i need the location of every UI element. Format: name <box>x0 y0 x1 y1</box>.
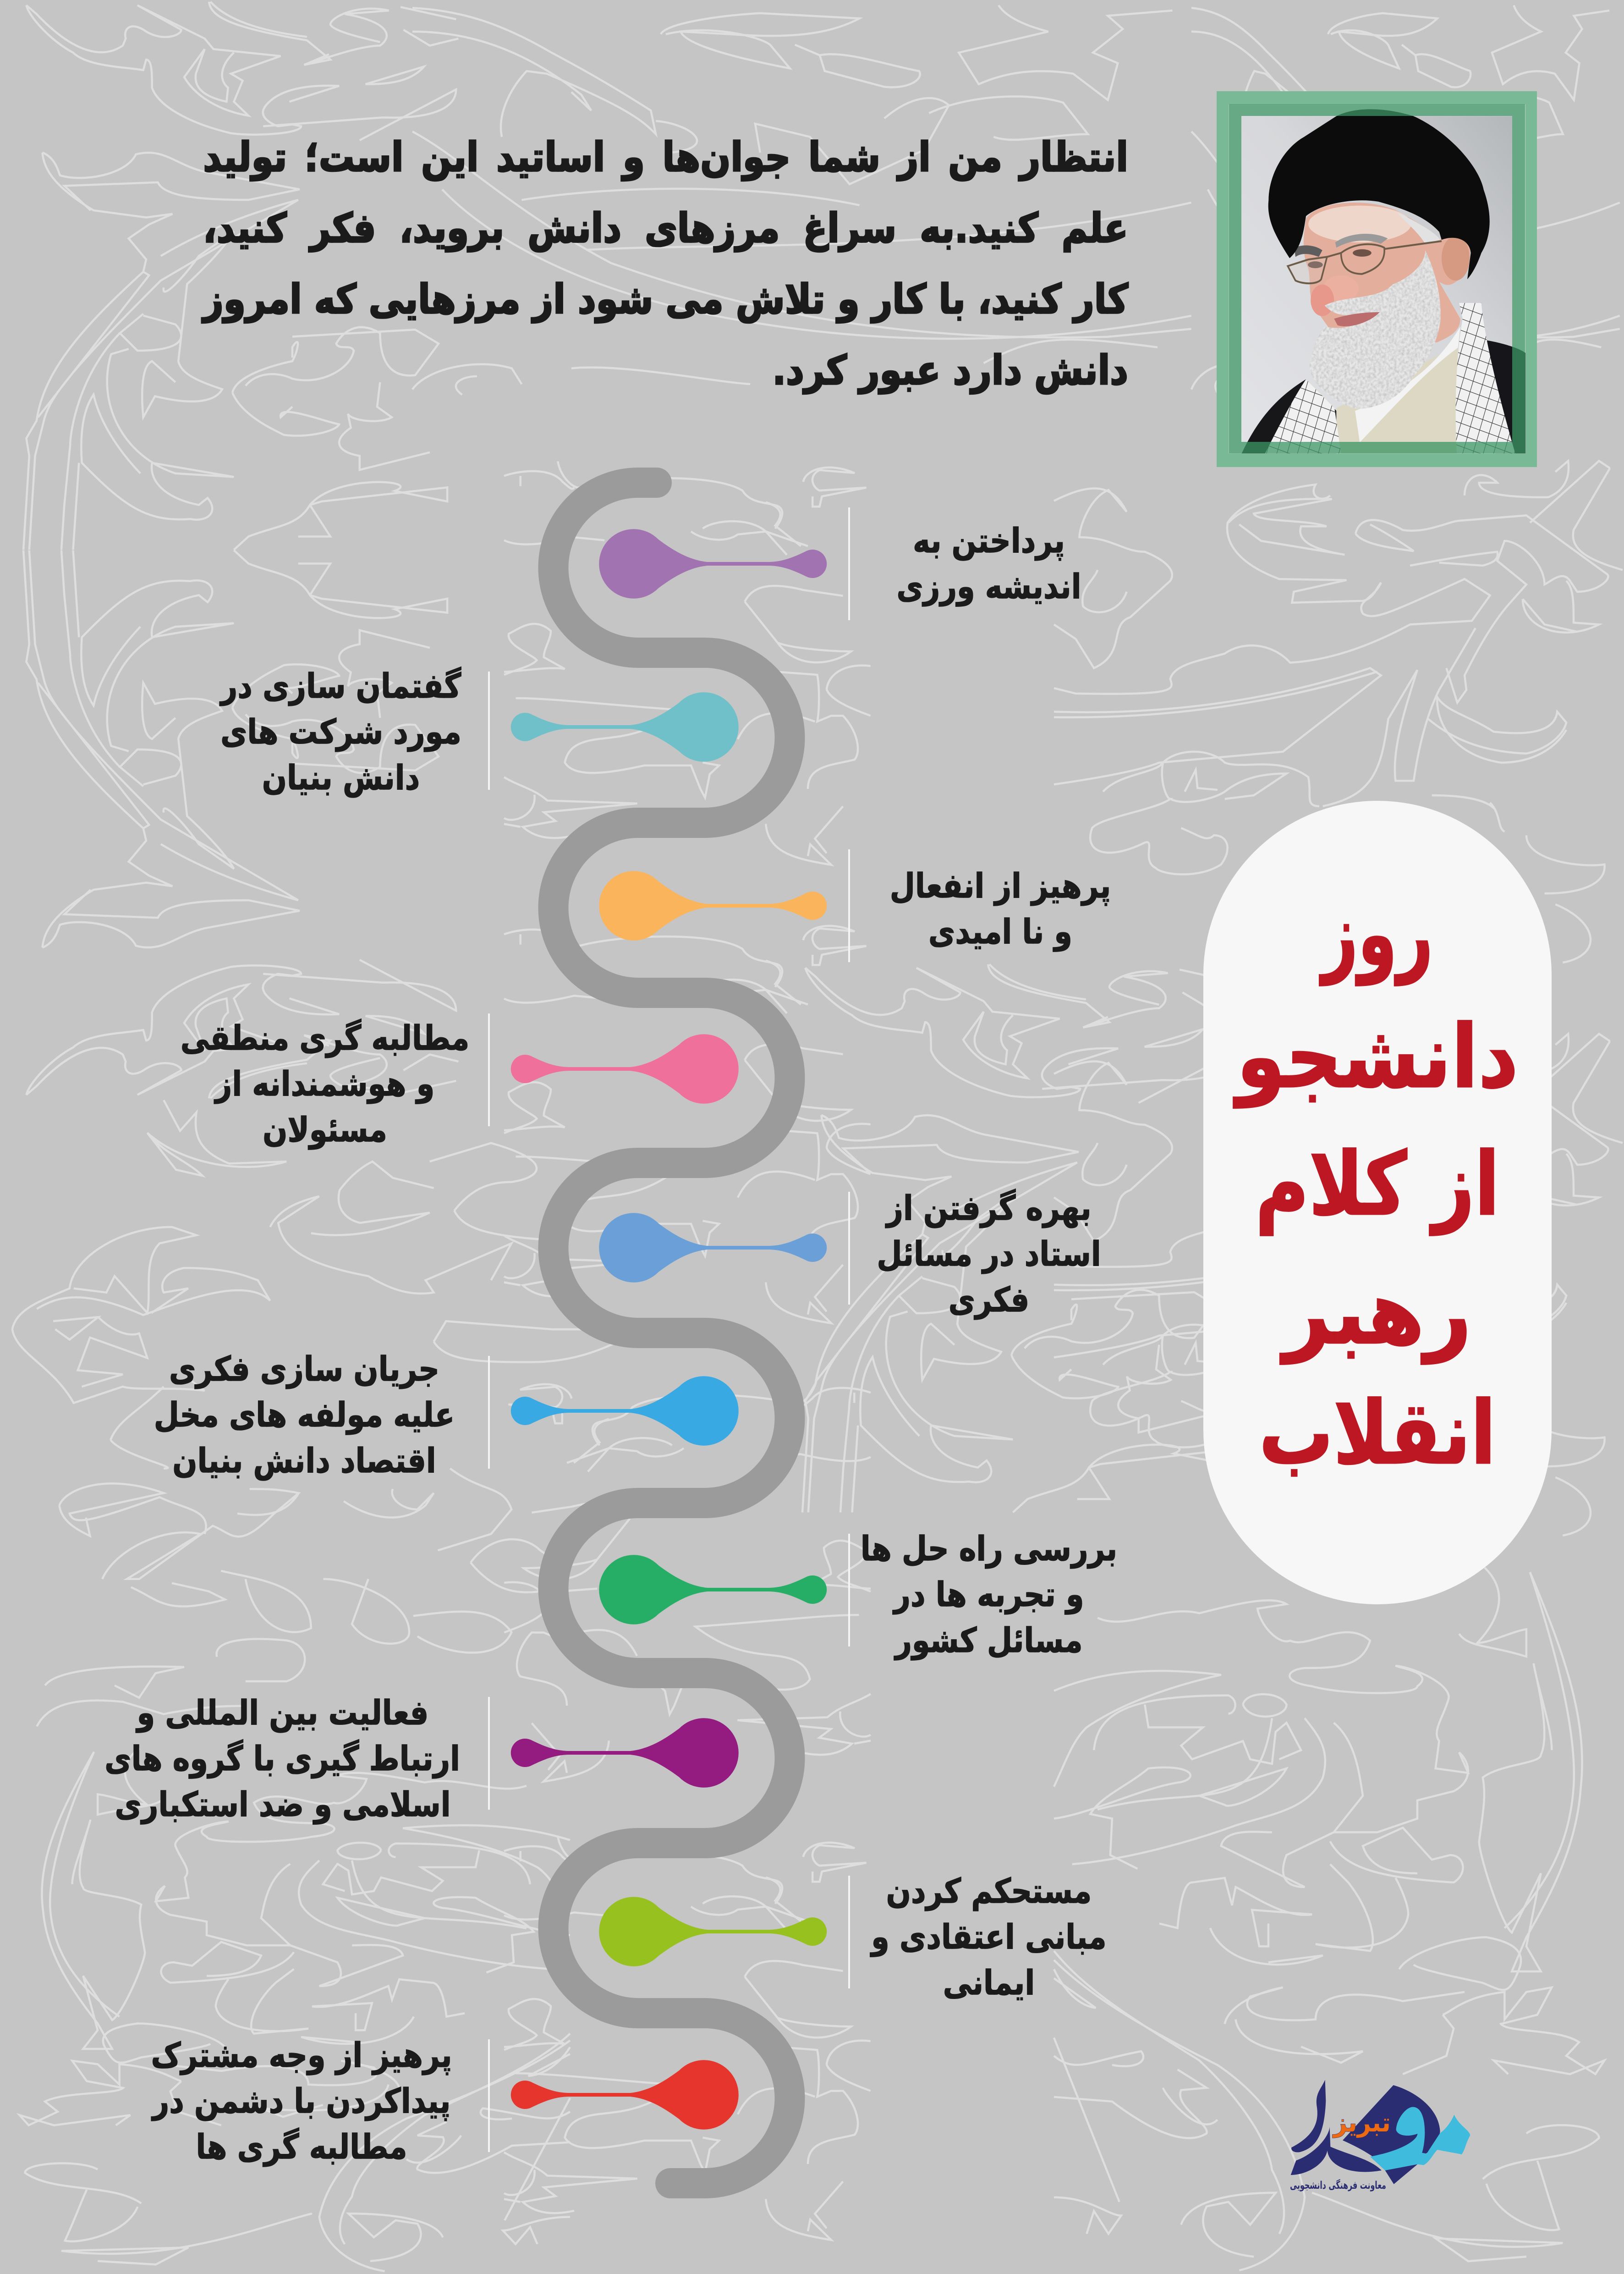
title pill: انقلاب <box>1259 1382 1496 1484</box>
label 4 <box>148 1015 502 1153</box>
beard <box>1310 250 1441 409</box>
title pill: روز <box>1322 884 1433 985</box>
label 3: و نا امیدی <box>928 912 1072 952</box>
drop marker 1 <box>599 529 827 599</box>
drop marker 10 <box>511 2060 739 2130</box>
label 2: مورد شرکت های <box>220 712 461 752</box>
label 8: ارتباط گیری با گروه های <box>104 1739 460 1778</box>
glasses <box>1288 241 1442 283</box>
logo: معاونت فرهنگی دانشجویی <box>1290 2179 1386 2191</box>
label 6: اقتصاد دانش بنیان <box>172 1441 436 1481</box>
label 6 <box>127 1346 482 1484</box>
quote text: کار کنید، با کار و تلاش می شود از مرزهایی که امروز <box>203 275 1128 323</box>
title pill: دانشجو <box>1236 1006 1519 1107</box>
label 3: پرهیز از انفعال <box>890 866 1111 906</box>
label 4: و هوشمندانه از <box>215 1064 434 1104</box>
white label separators <box>488 507 850 2152</box>
label 1 <box>812 518 1166 610</box>
portrait frame outer band <box>1217 91 1537 467</box>
label 1: اندیشه ورزی <box>896 567 1081 606</box>
label 4: مسئولان <box>263 1110 387 1150</box>
label 3 <box>823 863 1178 955</box>
label 5 <box>812 1185 1166 1323</box>
label 10 <box>124 2032 479 2170</box>
drop marker 3 <box>599 871 827 941</box>
title pill <box>1203 801 1552 1604</box>
label 6: جریان سازی فکری <box>169 1349 439 1389</box>
face <box>1294 203 1470 342</box>
label 5: فکری <box>949 1280 1029 1320</box>
label 10: پرهیز از وجه مشترک <box>151 2036 452 2075</box>
label 6: علیه مولفه های مخل <box>154 1395 455 1435</box>
label 9: ایمانی <box>943 1963 1035 2003</box>
quote text <box>203 121 1128 406</box>
label 9: مبانی اعتقادی و <box>871 1917 1107 1957</box>
title pill: رهبر <box>1284 1262 1471 1364</box>
label 10: مطالبه گری ها <box>196 2127 407 2167</box>
drop marker 8 <box>511 1718 739 1788</box>
label 8: اسلامی و ضد استکباری <box>115 1785 451 1824</box>
label 9: مستحکم کردن <box>886 1872 1092 1911</box>
logo: تبریز <box>1332 2108 1391 2138</box>
portrait <box>1229 104 1525 453</box>
label 7: بررسی راه حل ها <box>861 1529 1117 1569</box>
drop marker 7 <box>599 1555 827 1624</box>
quote text: دانش دارد عبور کرد. <box>773 347 1128 394</box>
label 2 <box>164 663 518 801</box>
drop marker 9 <box>599 1897 827 1966</box>
label 4: مطالبه گری منطقی <box>181 1019 469 1058</box>
clothing <box>1242 303 1525 453</box>
label 9 <box>812 1868 1166 2006</box>
drop marker 6 <box>511 1376 739 1446</box>
label 10: پیداکردن با دشمن در <box>153 2081 450 2121</box>
drop marker 5 <box>599 1213 827 1283</box>
quote text: علم کنید.به سراغ مرزهای دانش بروید، فکر کنید، <box>203 204 1128 252</box>
drop marker 4 <box>511 1034 739 1104</box>
label 7: مسائل کشور <box>895 1621 1083 1660</box>
logo <box>1290 2080 1470 2191</box>
label 8: فعالیت بین المللی و <box>137 1693 428 1733</box>
label 2: دانش بنیان <box>262 758 420 798</box>
label 7 <box>812 1526 1166 1663</box>
label 1: پرداختن به <box>913 521 1065 561</box>
title pill: از کلام <box>1255 1134 1500 1235</box>
label 5: استاد در مسائل <box>877 1234 1101 1274</box>
portrait frame inner band <box>1229 104 1525 453</box>
winding road <box>554 483 790 2183</box>
label 5: بهره گرفتن از <box>886 1189 1092 1228</box>
drop marker 2 <box>511 692 739 762</box>
label 7: و تجربه ها در <box>894 1575 1084 1614</box>
turban <box>1268 109 1490 279</box>
label 8 <box>105 1690 460 1828</box>
label 2: گفتمان سازی در <box>221 666 461 706</box>
quote text: انتظار من از شما جوان‌ها و اساتید این است؛ تولید <box>203 133 1128 181</box>
